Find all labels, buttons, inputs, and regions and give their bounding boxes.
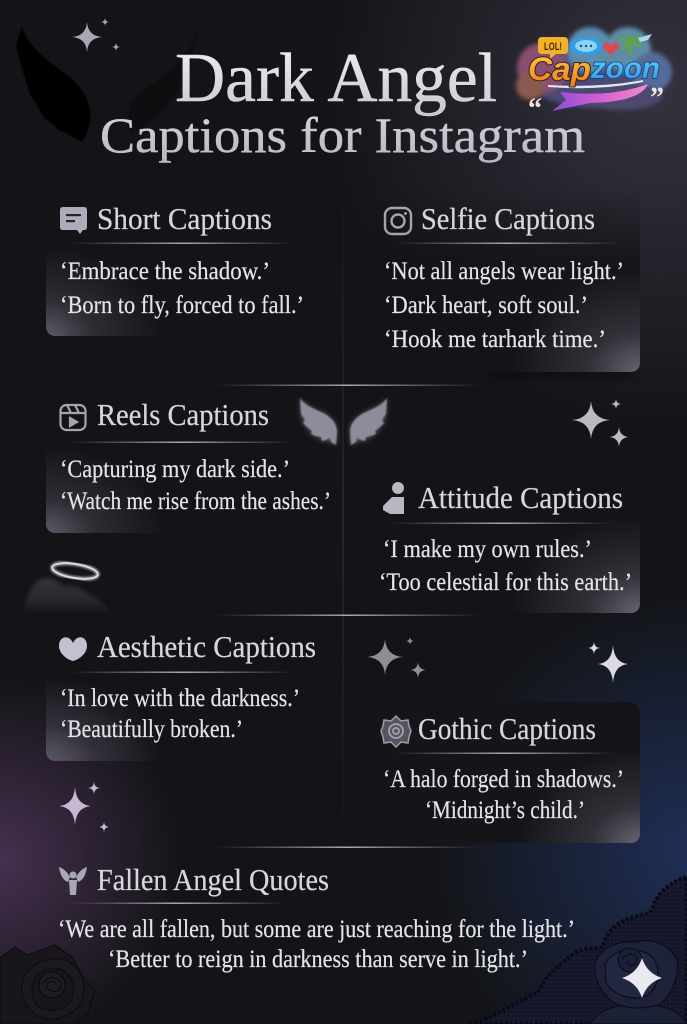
text: fallen angel quotes: ‘Better to reign in darkness than serve in light.’	[108, 946, 528, 973]
icon: dark wings behind title	[16, 27, 197, 142]
icon: rose bottom left	[0, 945, 95, 1024]
icon: sparkles middle	[367, 637, 426, 678]
text: reels caption quotes: ‘Watch me rise from the ashes.’	[60, 488, 331, 515]
text: short caption quotes: ‘Embrace the shadow.’	[60, 258, 270, 285]
heading: attitude captions: Attitude Captions	[418, 480, 623, 515]
icon: sparkles lower left	[59, 782, 109, 832]
panel: reels captions	[46, 397, 331, 533]
icon: speech bubble	[60, 207, 87, 234]
title	[100, 40, 585, 163]
text: attitude caption quotes: ‘Too celestial for this earth.’	[379, 569, 632, 596]
text: reels caption quotes: ‘Capturing my dark side.’	[60, 456, 290, 483]
icon: person	[383, 482, 404, 514]
logo: Capzoon: “	[528, 92, 542, 125]
icon: angel	[59, 867, 87, 895]
text: attitude caption quotes	[379, 536, 632, 596]
icon: reels	[60, 405, 86, 430]
panel: short captions	[46, 201, 304, 336]
icon: lace and rose bottom right	[470, 877, 687, 1024]
icon: sparkles upper right	[572, 399, 629, 447]
text: selfie caption quotes: ‘Dark heart, soft soul.’	[384, 292, 588, 319]
panel: attitude captions	[379, 480, 640, 613]
vertical center divider	[342, 195, 344, 835]
text: gothic caption quotes: ‘Midnight’s child.’	[425, 797, 585, 824]
heading: selfie captions: Selfie Captions	[421, 201, 595, 236]
text: fallen angel quotes	[58, 916, 575, 973]
text: attitude caption quotes: ‘I make my own rules.’	[383, 536, 592, 563]
text: aesthetic caption quotes: ‘Beautifully broken.’	[60, 716, 243, 743]
title: Dark Angel	[175, 40, 497, 117]
heading: aesthetic captions: Aesthetic Captions	[97, 629, 316, 664]
logo: Capzoon	[516, 27, 672, 125]
heading: fallen angel quotes: Fallen Angel Quotes	[97, 862, 329, 897]
logo: Capzoon: LOL!	[544, 41, 562, 53]
panel: fallen angel quotes	[58, 862, 575, 973]
heading: reels captions: Reels Captions	[97, 397, 269, 432]
text: short caption quotes: ‘Born to fly, forced to fall.’	[60, 292, 304, 319]
heading: gothic captions: Gothic Captions	[418, 711, 596, 746]
icon: white sparkle bottom right	[622, 958, 662, 998]
heading: short captions: Short Captions	[97, 201, 272, 236]
icon: gothic rosette	[381, 716, 411, 747]
text: selfie caption quotes	[384, 258, 624, 353]
logo: Capzoon: Cap	[528, 51, 591, 87]
text: gothic caption quotes	[383, 766, 624, 824]
text: gothic caption quotes: ‘A halo forged in shadows.’	[383, 766, 624, 793]
panel: gothic captions	[366, 702, 640, 843]
text: short caption quotes	[60, 258, 304, 319]
icon: instagram	[385, 208, 411, 234]
text: aesthetic caption quotes	[60, 685, 300, 743]
title: Captions for Instagram	[100, 107, 585, 163]
text: aesthetic caption quotes: ‘In love with the darkness.’	[60, 685, 300, 712]
logo: Capzoon: zoon	[590, 52, 660, 85]
icon: halo and cloud	[24, 560, 116, 618]
icon: heart	[59, 637, 87, 661]
text: selfie caption quotes: ‘Not all angels wear light.’	[384, 258, 624, 285]
icon: sparkles right	[588, 642, 628, 683]
panel: aesthetic captions	[46, 629, 316, 761]
icon: light wings	[300, 398, 387, 445]
text: fallen angel quotes: ‘We are all fallen, but some are just reaching for the light.’	[58, 916, 575, 943]
text: reels caption quotes	[60, 456, 331, 515]
icon: sparkles top left	[72, 18, 120, 52]
logo: Capzoon: ”	[650, 81, 664, 114]
text: selfie caption quotes: ‘Hook me tarhark time.’	[384, 326, 606, 353]
panel: selfie captions	[372, 190, 640, 375]
